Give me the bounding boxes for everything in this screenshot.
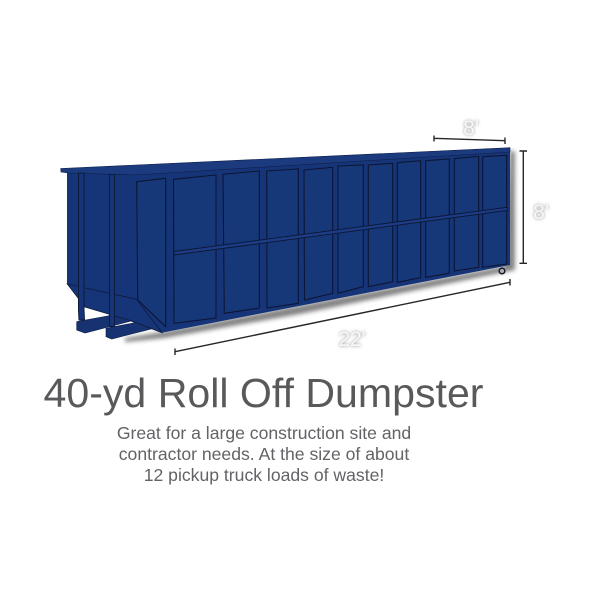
description: Great for a large construction site and bbox=[117, 423, 411, 443]
roller wheel bbox=[499, 268, 505, 274]
corner panel bbox=[137, 178, 166, 327]
side panels bbox=[174, 155, 507, 323]
label: height: 8' bbox=[533, 201, 549, 224]
dimension: width 8 feet bbox=[434, 136, 505, 144]
end face posts bbox=[78, 173, 114, 326]
description: 12 pickup truck loads of waste! bbox=[144, 465, 384, 485]
drop shadow bbox=[125, 150, 515, 342]
description bbox=[117, 423, 411, 485]
dumpster illustration bbox=[61, 148, 515, 342]
end face of container bbox=[67, 170, 162, 333]
top rim bbox=[61, 148, 510, 175]
rear skid rail bbox=[77, 316, 135, 333]
dimension: height 8 feet bbox=[520, 151, 527, 263]
title: 40-yd Roll Off Dumpster bbox=[43, 370, 484, 416]
horizontal rail bbox=[174, 207, 507, 255]
dimension: length 22 feet bbox=[175, 279, 510, 355]
side face of container bbox=[135, 148, 510, 333]
description: contractor needs. At the size of about bbox=[119, 444, 409, 464]
label: length: 22' bbox=[338, 328, 366, 351]
label: width: 8' bbox=[463, 117, 479, 140]
front skid rail bbox=[106, 322, 155, 339]
hopper underside bbox=[67, 284, 162, 333]
